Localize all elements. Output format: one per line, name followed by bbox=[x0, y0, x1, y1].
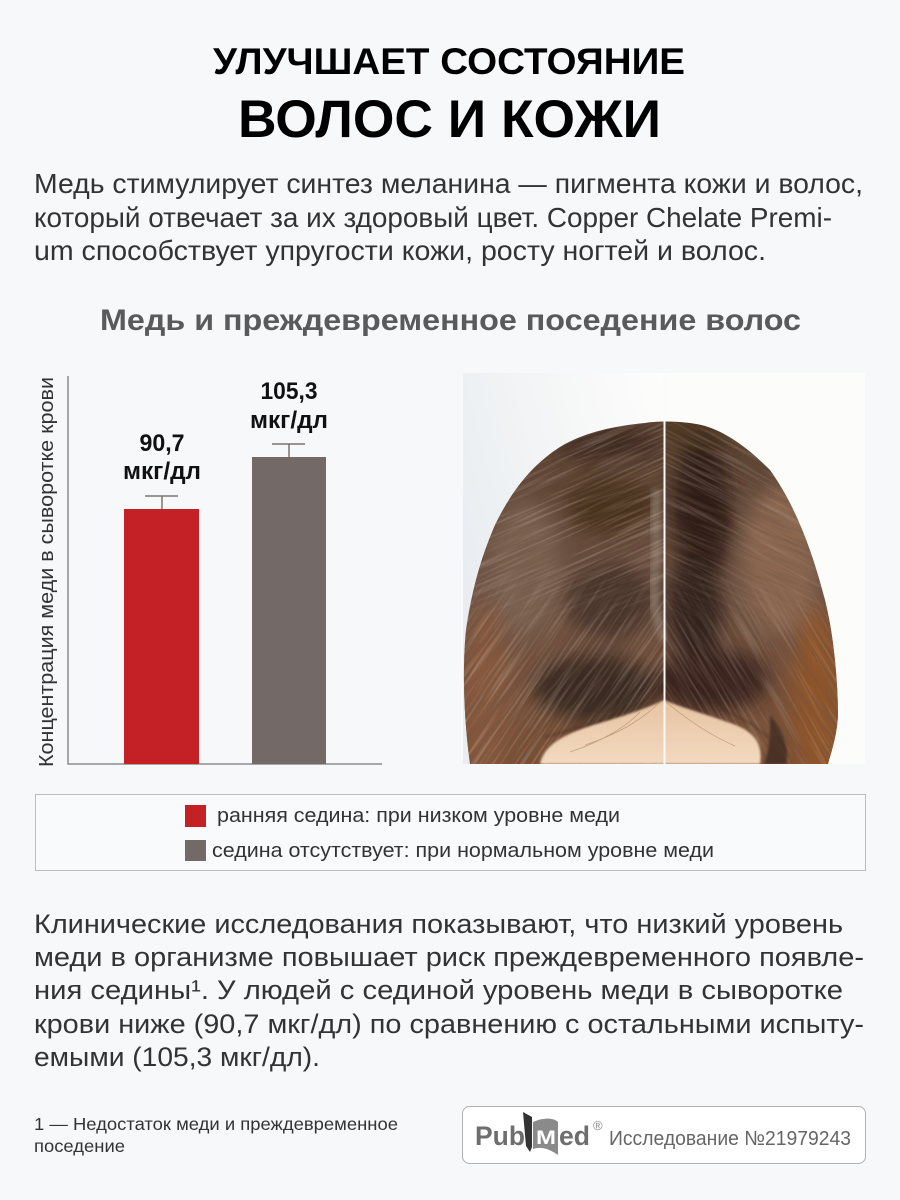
hair texture: lower left bbox=[464, 584, 664, 764]
body text block: меди в организме повышает риск преждевременного появле- bbox=[34, 942, 864, 972]
value label: 105,3: 105,3 bbox=[260, 378, 318, 405]
value label: 90,7 bbox=[123, 430, 201, 485]
intro text block: который отвечает за их здоровый цвет. Copper Chelate Premi- bbox=[34, 202, 832, 233]
legend bbox=[36, 794, 866, 870]
intro text block: Медь стимулирует синтез меланина — пигмента кожи и волос, bbox=[34, 168, 863, 199]
hair texture: upper left bbox=[472, 422, 664, 612]
footnote: 1 — Недостаток меди и преждевременное bbox=[34, 1114, 398, 1134]
intro text block: um способствует упругости кожи, росту ногтей и волос. bbox=[34, 235, 766, 266]
icon: PubMed logo: ® bbox=[593, 1118, 603, 1133]
hair texture: lower right bbox=[666, 588, 838, 764]
chart heading: Медь и преждевременное поседение волос bbox=[100, 304, 801, 337]
bar: no grey hair bbox=[252, 457, 326, 764]
bar: early grey hair bbox=[124, 509, 199, 764]
parting bbox=[653, 490, 664, 640]
PubMed badge bbox=[462, 1106, 866, 1164]
icon: PubMed logo: ed bbox=[559, 1121, 590, 1151]
icon: PubMed logo bbox=[475, 1112, 603, 1155]
hair mass bbox=[464, 422, 838, 764]
value label: 90,7: 90,7 bbox=[140, 430, 184, 457]
icon: PubMed logo: M bbox=[536, 1128, 556, 1149]
axes bbox=[68, 376, 382, 764]
bar chart bbox=[35, 376, 382, 767]
title: ВОЛОС И КОЖИ bbox=[238, 90, 661, 149]
body text block: крови ниже (90,7 мкг/дл) по сравнению с остальными испыту- bbox=[34, 1009, 864, 1039]
title: УЛУЧШАЕТ СОСТОЯНИЕ bbox=[213, 41, 685, 82]
hairline wisps bbox=[570, 702, 735, 752]
body text block bbox=[34, 909, 864, 1072]
icon: PubMed logo: Pub bbox=[475, 1121, 525, 1151]
y axis label: Концентрация меди в сыворотке крови bbox=[35, 377, 58, 767]
value label: 105,3: мкг/дл bbox=[250, 407, 328, 434]
body text block: Клинические исследования показывают, что низкий уровень bbox=[34, 909, 843, 939]
legend item: early grey hair: ранняя седина: при низком уровне меди bbox=[217, 804, 620, 827]
intro text block bbox=[34, 168, 863, 266]
hair texture: upper right bbox=[666, 422, 822, 604]
forehead skin bbox=[540, 700, 761, 764]
footnote: поседение bbox=[34, 1136, 125, 1156]
value label: 105,3 bbox=[250, 378, 328, 434]
photo: hair before and after bbox=[463, 373, 838, 764]
error bars bbox=[145, 444, 305, 509]
footnote bbox=[34, 1114, 398, 1156]
title bbox=[213, 41, 685, 149]
value label: 90,7: мкг/дл bbox=[123, 458, 201, 485]
study number: Исследование №21979243 bbox=[609, 1127, 851, 1150]
divider bbox=[664, 422, 666, 764]
body text block: емыми (105,3 мкг/дл). bbox=[34, 1042, 320, 1072]
legend item: no grey hair: седина отсутствует: при нормальном уровне меди bbox=[212, 839, 714, 862]
body text block: ния седины¹. У людей с сединой уровень меди в сыворотке bbox=[34, 975, 843, 1005]
